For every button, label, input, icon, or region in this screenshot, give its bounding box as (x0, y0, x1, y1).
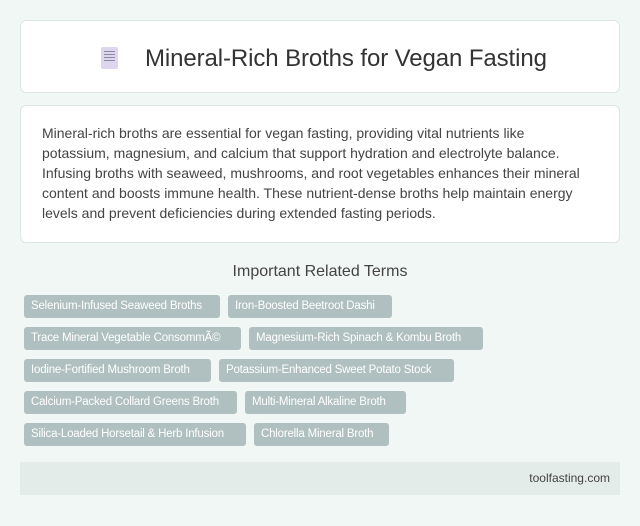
tag: Chlorella Mineral Broth (261, 428, 373, 440)
tag (254, 423, 389, 446)
tag (24, 359, 211, 382)
tag: Calcium-Packed Collard Greens Broth (31, 396, 219, 408)
description panel (20, 105, 620, 243)
tag: Potassium-Enhanced Sweet Potato Stock (226, 364, 431, 376)
footer text: toolfasting.com (529, 471, 610, 485)
tag: Magnesium-Rich Spinach & Kombu Broth (256, 332, 461, 344)
tag (24, 423, 246, 446)
tag (219, 359, 454, 382)
title: Mineral-Rich Broths for Vegan Fasting (145, 45, 547, 72)
tag (24, 295, 220, 318)
tag (245, 391, 406, 414)
tag (24, 391, 237, 414)
description text: Mineral-rich broths are essential for vegan fasting, providing vital nutrients like potassium, magnesium, and calcium that support hydration and electrolyte balance. Infusing broths with seaweed, mushrooms, and root vegetables enhances their mineral content and boosts immune health. These nutrient-dense broths help maintain energy levels and prevent deficiencies during extended fasting periods. (42, 125, 580, 221)
tag: Multi-Mineral Alkaline Broth (252, 396, 386, 408)
footer (20, 462, 620, 495)
tag (24, 327, 241, 350)
tag: Iodine-Fortified Mushroom Broth (31, 364, 190, 376)
title panel (20, 20, 620, 93)
tag (249, 327, 483, 350)
heading: related terms: Important Related Terms (233, 263, 407, 280)
tag: Iron-Boosted Beetroot Dashi (235, 300, 375, 312)
tag: Selenium-Infused Seaweed Broths (31, 300, 202, 312)
icon: scroll (101, 47, 118, 69)
tag: Silica-Loaded Horsetail & Herb Infusion (31, 428, 224, 440)
tag: Trace Mineral Vegetable ConsommÃ© (31, 332, 220, 344)
tag (228, 295, 392, 318)
